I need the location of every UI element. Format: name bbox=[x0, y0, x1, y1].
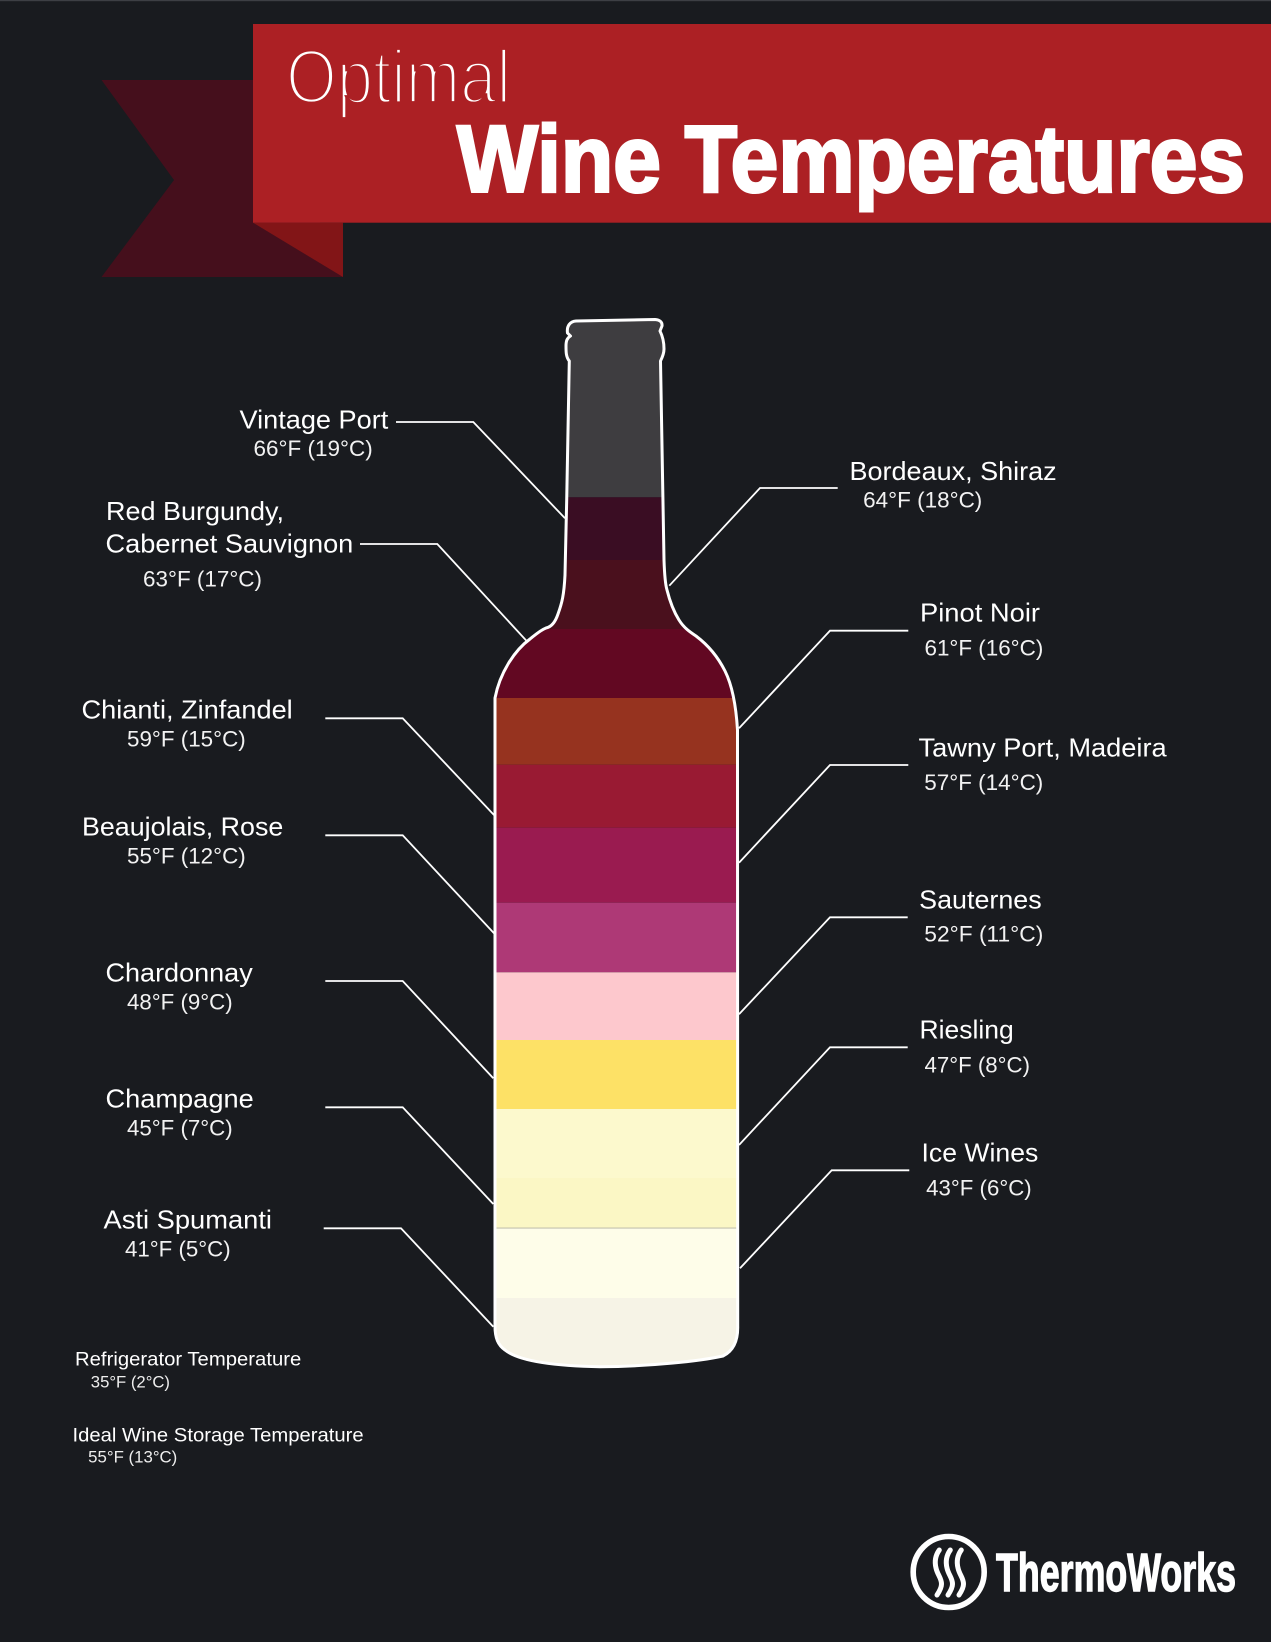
note: Ideal Wine Storage Temperature bbox=[72, 1425, 364, 1467]
label: Red Burgundy, Cabernet Sauvignon: Red Burgundy, bbox=[106, 496, 284, 526]
note: Refrigerator Temperature bbox=[75, 1349, 301, 1391]
label: Bordeaux, Shiraz: Bordeaux, Shiraz bbox=[850, 456, 1057, 486]
label: Asti Spumanti: Asti Spumanti bbox=[104, 1205, 272, 1235]
label: Red Burgundy, Cabernet Sauvignon: 63°F (17°C) bbox=[143, 567, 262, 592]
label: Red Burgundy, Cabernet Sauvignon bbox=[106, 496, 527, 642]
label: Ice Wines: 43°F (6°C) bbox=[926, 1176, 1032, 1201]
label: Chianti, Zinfandel: 59°F (15°C) bbox=[127, 727, 246, 752]
ribbon fold bbox=[253, 223, 343, 277]
label: Chianti, Zinfandel: Chianti, Zinfandel bbox=[82, 695, 293, 725]
logo: ThermoWorks bbox=[913, 1536, 1236, 1608]
bottle colour bands bbox=[496, 321, 736, 1366]
label: Pinot Noir: Pinot Noir bbox=[920, 598, 1040, 628]
wine bottle bbox=[494, 318, 740, 1368]
label: Red Burgundy, Cabernet Sauvignon: Cabernet Sauvignon bbox=[106, 529, 353, 559]
label: Champagne: 45°F (7°C) bbox=[127, 1115, 233, 1140]
label: Tawny Port, Madeira: Tawny Port, Madeira bbox=[918, 733, 1167, 763]
icon: heat waves in circle bbox=[913, 1536, 984, 1608]
note: Refrigerator Temperature: 35°F (2°C) bbox=[91, 1373, 170, 1391]
label: Riesling: Riesling bbox=[920, 1015, 1014, 1045]
label: Asti Spumanti bbox=[104, 1205, 493, 1327]
note: Refrigerator Temperature: Refrigerator Temperature bbox=[75, 1349, 301, 1371]
title: Optimal: Optimal bbox=[286, 35, 511, 120]
ribbon main band bbox=[253, 24, 1271, 223]
label: Chardonnay: 48°F (9°C) bbox=[127, 989, 233, 1014]
label: Sauternes: 52°F (11°C) bbox=[924, 922, 1043, 947]
label: Vintage Port bbox=[240, 404, 565, 518]
label: Beaujolais, Rose: Beaujolais, Rose bbox=[82, 812, 283, 842]
label: Sauternes: Sauternes bbox=[919, 885, 1042, 915]
label: Champagne bbox=[106, 1084, 493, 1204]
label: Ice Wines bbox=[740, 1138, 1038, 1268]
label: Sauternes bbox=[739, 885, 1043, 1014]
label: Bordeaux, Shiraz bbox=[669, 456, 1057, 586]
label: Pinot Noir bbox=[739, 598, 1043, 728]
label: Chianti, Zinfandel bbox=[82, 695, 494, 815]
label: Ice Wines: Ice Wines bbox=[922, 1138, 1038, 1168]
note: Ideal Wine Storage Temperature: Ideal Wine Storage Temperature bbox=[72, 1425, 364, 1447]
label: Pinot Noir: 61°F (16°C) bbox=[924, 636, 1043, 661]
label: Chardonnay bbox=[106, 958, 493, 1078]
label: Vintage Port: Vintage Port bbox=[240, 404, 389, 434]
note: Ideal Wine Storage Temperature: 55°F (13°C) bbox=[88, 1449, 177, 1467]
label: Vintage Port: 66°F (19°C) bbox=[254, 436, 373, 461]
label: Beaujolais, Rose bbox=[82, 812, 494, 933]
label: Beaujolais, Rose: 55°F (12°C) bbox=[127, 843, 246, 868]
label: Tawny Port, Madeira bbox=[739, 733, 1167, 863]
label: Asti Spumanti: 41°F (5°C) bbox=[125, 1237, 231, 1262]
label: Riesling bbox=[739, 1015, 1030, 1145]
label: Bordeaux, Shiraz: 64°F (18°C) bbox=[863, 487, 982, 512]
bottle outline bbox=[495, 320, 738, 1367]
label: Champagne: Champagne bbox=[106, 1084, 254, 1114]
label: Chardonnay: Chardonnay bbox=[106, 958, 253, 988]
label: Tawny Port, Madeira: 57°F (14°C) bbox=[924, 770, 1043, 795]
label: Riesling: 47°F (8°C) bbox=[924, 1053, 1030, 1078]
ribbon tail bbox=[102, 80, 343, 277]
ribbon banner bbox=[102, 24, 1271, 277]
